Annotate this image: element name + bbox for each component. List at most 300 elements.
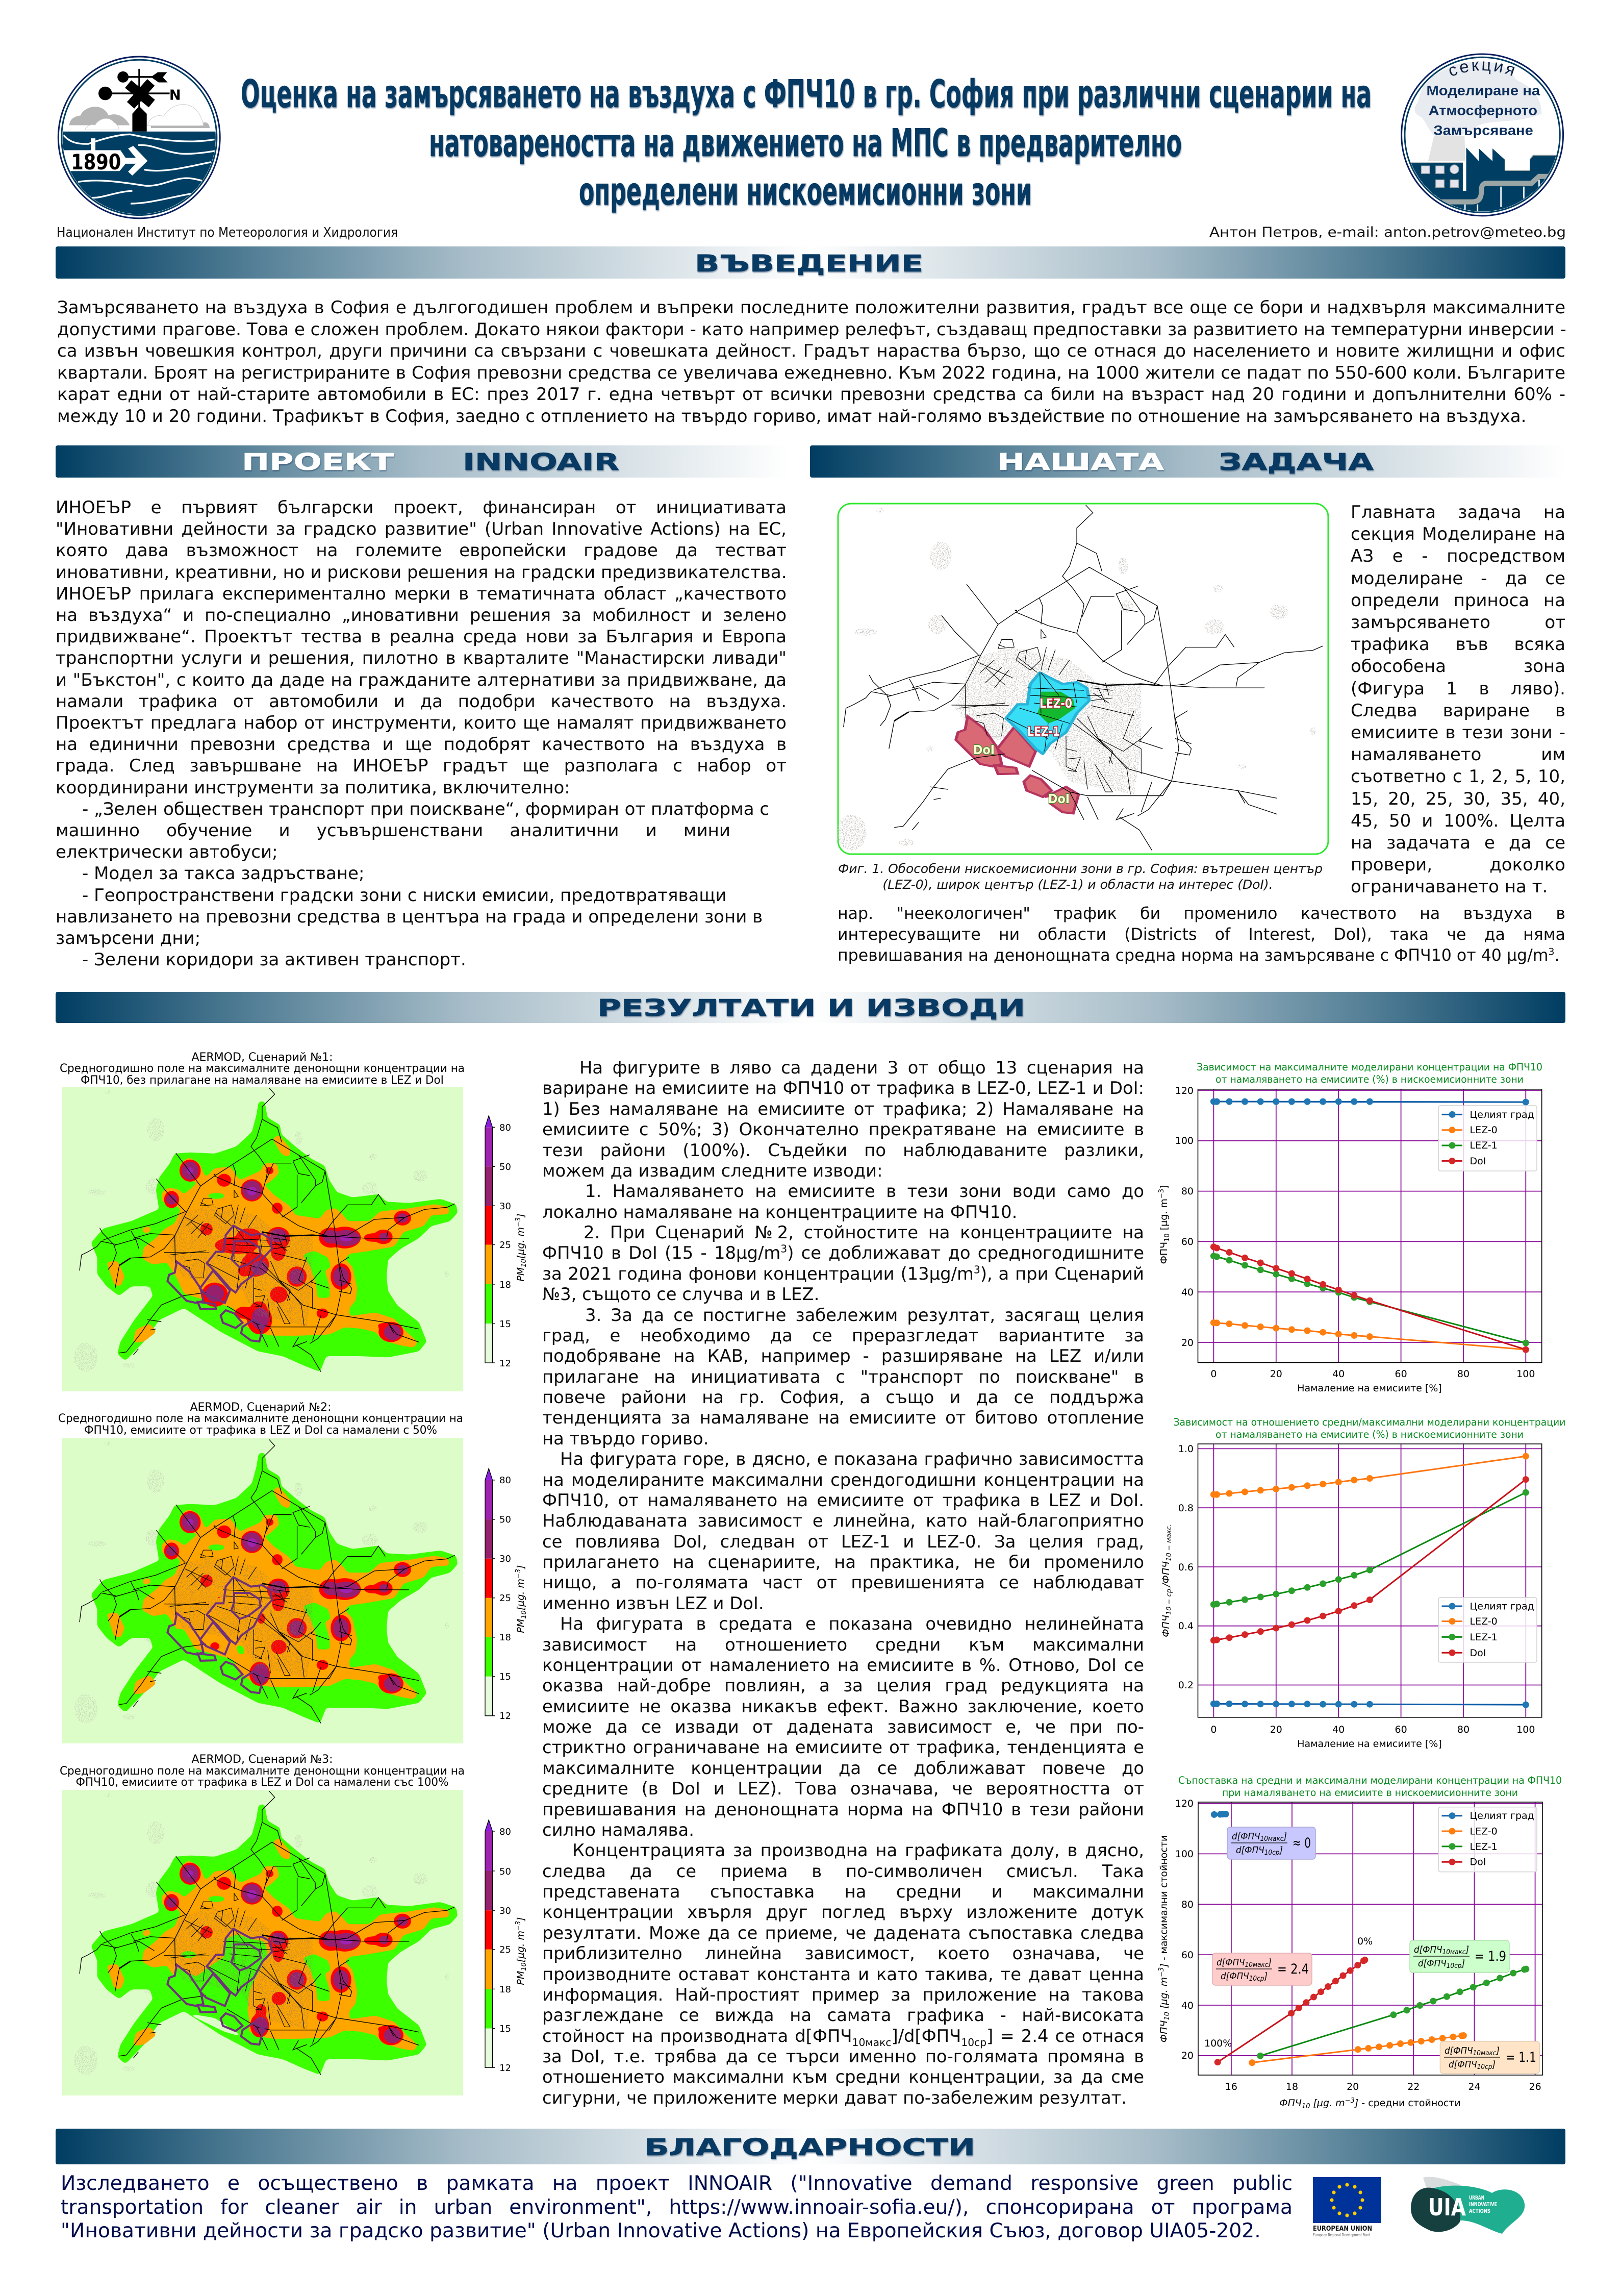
text: our task, continuation: нар. "неекологичен" трафик би променило качеството на въздуха в	[838, 905, 1565, 923]
map: scenario 1: ФПЧ10, без прилагане на намаляване на емисиите в LEZ и DoI	[81, 1074, 444, 1087]
chart 1: maximum concentrations vs emission reduction: LEZ-0	[1470, 1125, 1498, 1136]
chart 1: maximum concentrations vs emission reduction: 80	[1181, 1186, 1194, 1197]
heading: introduction	[56, 246, 1565, 279]
text: project INNOAIR: - „Зелен обществен транспорт при поискване“, формиран от платформа с	[82, 799, 769, 819]
callout: LEZ-0 derivative: ]	[1492, 2059, 1496, 2070]
chart 3: mean versus maximum concentrations: −3	[1158, 1967, 1166, 1977]
text: our task, narrow column: на задачата е да се	[1351, 833, 1565, 853]
chart 2: mean to maximum ratio vs emission reduction: 60	[1395, 1724, 1407, 1735]
text: our task, narrow column: замърсяването от	[1351, 612, 1565, 633]
map: scenario 3: 15	[499, 2024, 511, 2034]
callout: LEZ-1 derivative: = 1.9	[1475, 1949, 1506, 1964]
chart 1: maximum concentrations vs emission reduction: 60	[1395, 1368, 1407, 1380]
figure 1: low emission zones map: DoI	[1048, 791, 1070, 806]
text: results and conclusions	[542, 1058, 1144, 2108]
text: results and conclusions: повече райони на гр. София, а също и да се поддържа	[542, 1387, 1144, 1407]
chart 3: mean versus maximum concentrations: 120	[1175, 1798, 1194, 1809]
chart 3: mean versus maximum concentrations: DoI	[1470, 1857, 1486, 1868]
chart 1: maximum concentrations vs emission reduction: 20	[1181, 1337, 1194, 1349]
chart 3: mean versus maximum concentrations: 22	[1407, 2081, 1420, 2092]
text: results and conclusions: именно извън LEZ и DoI.	[542, 1593, 764, 1613]
text: acknowledgements: Изследването е осъществено в рамката на проект INNOAIR ("Innovative demand responsive green public	[61, 2172, 1293, 2195]
text: results and conclusions: 3. За да се постигне забележим резултат, засягащ целия	[585, 1305, 1144, 1325]
text: results and conclusions: силно намалява.	[542, 1820, 694, 1840]
heading: project INNOAIR: ПРОЕКТ	[242, 448, 394, 476]
text: results and conclusions: отношението максимални към средни концентрации, за да сме	[542, 2067, 1144, 2087]
text: project INNOAIR: - Модел за такса задръстване;	[82, 863, 364, 884]
icon: European Union flag: EUROPEAN UNION	[1313, 2225, 1372, 2233]
text: our task, narrow column: секция Моделиране на	[1351, 524, 1565, 544]
text: results and conclusions: ФПЧ10, от намаляването на емисиите от трафика в LEZ и DoI.	[542, 1490, 1144, 1510]
text: our task, narrow column: емисиите в тези зони -	[1351, 722, 1565, 743]
text: project INNOAIR: транспортни услуги и решения, пилотно в кварталите "Манастирски ливади"	[56, 648, 787, 668]
title: определени нискоемисионни зони	[579, 169, 1032, 214]
icon: Urban Innovative Actions logo: ACTIONS	[1469, 2208, 1490, 2214]
figure 1 caption: Фиг. 1. Обособени нискоемисионни зони в гр. София: вътрешен център	[838, 861, 1323, 876]
chart 1: maximum concentrations vs emission reduction: 20	[1270, 1368, 1282, 1380]
text: our task, narrow column: съответно с 1, 2, 5, 10,	[1351, 766, 1565, 787]
text: results and conclusions: емисиите не оказва никакъв ефект. Важно заключение, което	[542, 1696, 1144, 1716]
text: introduction: квартали. Броят на регистрираните в София превозни средства се увеличава ежедневно. Към 2022 година, на 1000 жители се падат по 550-600 коли. Българите	[57, 362, 1565, 383]
map: scenario 2: ]	[515, 1565, 526, 1569]
text: our task, narrow column: обособена зона	[1351, 656, 1565, 677]
text: introduction	[57, 297, 1566, 427]
map: scenario 2: −3	[515, 1569, 522, 1579]
chart 1: maximum concentrations vs emission reduction: 80	[1457, 1368, 1470, 1380]
text: project INNOAIR: замърсени дни;	[56, 928, 200, 949]
chart 3: mean versus maximum concentrations: 10	[1163, 2012, 1171, 2020]
chart 1: maximum concentrations vs emission reduction: 0	[1210, 1368, 1217, 1380]
chart 3: mean versus maximum concentrations	[1158, 1775, 1562, 2110]
text: results and conclusions: емисиите с 50%; 3) Окончателно прекратяване на емисиите в	[542, 1119, 1144, 1139]
map: scenario 1: −3	[515, 1217, 522, 1227]
chart 2: mean to maximum ratio vs emission reduction: 10 − макс.	[1166, 1524, 1173, 1561]
logo: National Institute of Meteorology and Hydrology: 1890	[71, 149, 121, 174]
callout: LEZ-0 derivative: = 1.1	[1506, 2050, 1536, 2065]
callout: LEZ-0 derivative: ]	[1496, 2045, 1500, 2056]
chart 2: mean to maximum ratio vs emission reduction: 0.8	[1178, 1503, 1194, 1514]
chart 2: mean to maximum ratio vs emission reduction: 0.2	[1178, 1680, 1194, 1691]
chart 1: maximum concentrations vs emission reduction: DoI	[1470, 1156, 1486, 1167]
heading: our task: НАШАТА	[997, 448, 1164, 476]
text: results and conclusions: на моделираните максимални срендогодишни концентрации на	[542, 1469, 1144, 1490]
text: acknowledgements: transportation for cleaner air in urban environment", https://www.innoair-sofia.eu/), спонсорирана от програма	[61, 2196, 1293, 2219]
text: results and conclusions: приблизително линейна зависимост, което означава, че	[542, 1943, 1144, 1963]
chart 3: mean versus maximum concentrations: ]	[1158, 1963, 1170, 1968]
callout: whole city derivative	[1227, 1827, 1315, 1859]
text: project INNOAIR: електрически автобуси;	[56, 842, 278, 862]
text: project INNOAIR: на единични превозни средства и ще подобрят качеството на въздуха в	[56, 734, 787, 755]
callout: whole city derivative: 10макс	[1260, 1835, 1283, 1843]
text: results and conclusions: оказва най-добре повлиян, а за целия град редукцията на	[542, 1676, 1144, 1695]
map: scenario 1: AERMOD, Сценарий №1:	[191, 1051, 333, 1064]
text: our task, narrow column: Главната задача на	[1351, 502, 1565, 522]
chart 3: mean versus maximum concentrations: LEZ-1	[1470, 1841, 1498, 1853]
text: project INNOAIR: на въздуха“ и по-специално „иновативни решения за мобилност и зелено	[56, 605, 787, 626]
map: scenario 3: 50	[499, 1866, 511, 1877]
map: scenario 1: 18	[499, 1280, 511, 1290]
chart 3: mean versus maximum concentrations: ]	[1354, 2098, 1358, 2109]
title	[241, 71, 1372, 214]
map: scenario 2: 15	[499, 1671, 511, 1682]
heading: acknowledgements: БЛАГОДАРНОСТИ	[644, 2134, 975, 2161]
map: scenario 2: 10	[520, 1610, 528, 1619]
map: scenario 3: 18	[499, 1984, 511, 1995]
text: results and conclusions: превишавания на денонощната норма на ФПЧ10 в тези райони	[542, 1799, 1144, 1819]
text: our task, narrow column: намаляването им	[1351, 744, 1565, 765]
map: scenario 2: Средногодишно поле на максималните денонощни концентрации на	[58, 1412, 463, 1425]
map: scenario 2: [µg. m	[515, 1579, 526, 1610]
chart 3: mean versus maximum concentrations: при намаляването на емисиите в нискоемисионните зони	[1222, 1787, 1518, 1799]
chart 1: maximum concentrations vs emission reduction: 100	[1516, 1368, 1535, 1380]
chart 2: mean to maximum ratio vs emission reduction: LEZ-1	[1470, 1632, 1498, 1643]
chart 2: mean to maximum ratio vs emission reduction: 1.0	[1178, 1443, 1194, 1455]
text: results and conclusions: тенденцията за намаляване на емисиите от битово отопление	[542, 1408, 1144, 1428]
map: scenario 3: −3	[515, 1921, 522, 1931]
chart 2: mean to maximum ratio vs emission reduction: 100	[1516, 1724, 1535, 1735]
text: results and conclusions: за 2021 година фонови концентрации (13μg/m3), а при Сценарий	[542, 1263, 1144, 1284]
text: results and conclusions: На фигурата в средата е показана очевидно нелинейната	[560, 1614, 1144, 1634]
text: results and conclusions: на твърдо гориво.	[542, 1429, 708, 1449]
icon: European Union flag: European Regional Development Fund	[1313, 2233, 1370, 2237]
text: our task, narrow column	[1351, 502, 1565, 897]
chart 1: maximum concentrations vs emission reduction: Целият град	[1470, 1109, 1534, 1120]
text: project INNOAIR: Проектът предлага набор от инструменти, които ще намалят придвижването	[56, 713, 787, 733]
chart 1: maximum concentrations vs emission reduction: 60	[1181, 1236, 1194, 1247]
chart 3: mean versus maximum concentrations: 40	[1181, 2000, 1194, 2011]
map: scenario 1: 10	[520, 1259, 528, 1267]
text: results and conclusions: прилагане на инициативата с "транспорт по поискване" в	[542, 1367, 1144, 1387]
chart 2: mean to maximum ratio vs emission reduction: 0.6	[1178, 1562, 1194, 1573]
text: results and conclusions: производните остават константа и като такива, те дават ценна	[542, 1964, 1144, 1984]
text: our task, narrow column: провери, доколко	[1351, 855, 1565, 875]
chart 3: mean versus maximum concentrations: LEZ-0	[1470, 1826, 1498, 1837]
chart 2: mean to maximum ratio vs emission reduction: ФПЧ	[1160, 1615, 1172, 1637]
text: results and conclusions: тези райони (100%). Съдейки по наблюдаваните разлики,	[542, 1140, 1144, 1160]
callout: LEZ-0 derivative: d[ФПЧ	[1445, 2045, 1475, 2056]
callout: LEZ-1 derivative: ]	[1465, 1944, 1469, 1955]
text: results and conclusions: стриктно ограничаване на емисиите от трафика, тенденцията е	[542, 1737, 1144, 1757]
text: results and conclusions: подобряване на КАВ, например - разширяване на LEZ и/или	[542, 1346, 1144, 1366]
text: results and conclusions: град, е необходимо да се преразгледат вариантите за	[542, 1326, 1144, 1345]
heading: results and conclusions	[56, 992, 1565, 1023]
chart 2: mean to maximum ratio vs emission reduction: 40	[1332, 1724, 1345, 1735]
callout: DoI derivative	[1212, 1953, 1312, 1985]
chart 3: mean versus maximum concentrations: 20	[1347, 2081, 1359, 2092]
chart 2: mean to maximum ratio vs emission reduction: Целият град	[1470, 1601, 1534, 1612]
logo: National Institute of Meteorology and Hydrology	[57, 56, 221, 219]
author: Антон Петров, e-mail: anton.petrov@meteo.bg	[1209, 224, 1566, 240]
chart 1: maximum concentrations vs emission reduction: 40	[1332, 1368, 1345, 1380]
map: scenario 3: 10	[520, 1962, 528, 1971]
text: results and conclusions: нищо, а по-голямата част от превишенията се наблюдават	[542, 1573, 1144, 1592]
callout: LEZ-1 derivative: d[ФПЧ	[1418, 1958, 1449, 1969]
map: scenario 2: 80	[499, 1475, 511, 1486]
figure 1: low emission zones map: LEZ-1	[1027, 724, 1060, 739]
map: scenario 2: ФПЧ10, емисиите от трафика в LEZ и DoI са намалени с 50%	[84, 1424, 437, 1437]
heading: results and conclusions: РЕЗУЛТАТИ И ИЗВОДИ	[597, 994, 1025, 1021]
callout: whole city derivative: ≈ 0	[1293, 1835, 1311, 1851]
chart 2: mean to maximum ratio vs emission reduction: Зависимост на отношението средни/максимални моделирани концентрации	[1173, 1416, 1566, 1428]
text: our task, narrow column: трафика във всяка	[1351, 634, 1565, 655]
map: scenario 1: 12	[499, 1358, 511, 1369]
callout: LEZ-1 derivative: ]	[1461, 1958, 1465, 1969]
heading: our task	[810, 445, 1565, 478]
text: results and conclusions: 1. Намаляването на емисиите в тези зони води само до	[585, 1181, 1144, 1201]
text: our task, narrow column: моделиране - да се	[1351, 568, 1565, 589]
chart 3: mean versus maximum concentrations: Целият град	[1470, 1810, 1534, 1821]
text: results and conclusions: следва да се приема в по-символичен смисъл. Така	[542, 1861, 1144, 1881]
callout: LEZ-1 derivative: d[ФПЧ	[1414, 1944, 1445, 1955]
icon: Urban Innovative Actions logo: UIA	[1428, 2193, 1466, 2221]
icon: Urban Innovative Actions logo: URBAN	[1469, 2195, 1484, 2201]
map: scenario 3: 12	[499, 2063, 511, 2074]
map: scenario 1	[60, 1051, 528, 1391]
figure 1 caption: (LEZ-0), широк център (LEZ-1) и области на интерес (DoI).	[882, 877, 1273, 892]
text: project INNOAIR	[56, 497, 787, 970]
map: scenario 2: AERMOD, Сценарий №2:	[190, 1401, 332, 1414]
text: results and conclusions: прилагането на сценариите, на практика, не би променило	[542, 1552, 1144, 1572]
chart 3: mean versus maximum concentrations: 10	[1302, 2103, 1310, 2110]
chart 3: mean versus maximum concentrations: −3	[1345, 2097, 1355, 2105]
chart 2: mean to maximum ratio vs emission reduction: DoI	[1470, 1648, 1486, 1659]
map: scenario 1: PM	[515, 1267, 526, 1282]
text: results and conclusions: зависимост на отношението средни към максимални	[542, 1635, 1144, 1654]
logo: section for atmospheric pollution modelling	[1401, 53, 1564, 216]
text: results and conclusions: сигурни, че приложените мерки дават по-забележим резултат.	[542, 2088, 1127, 2108]
chart 2: mean to maximum ratio vs emission reduction: 80	[1457, 1724, 1470, 1735]
map: scenario 1: 80	[499, 1122, 511, 1133]
callout: LEZ-1 derivative	[1410, 1940, 1509, 1973]
text: results and conclusions: концентрации от намалението на емисиите в %. Отново, DoI се	[542, 1655, 1144, 1675]
chart 2: mean to maximum ratio vs emission reduction	[1160, 1416, 1566, 1750]
text: results and conclusions: стойност на производната d[ФПЧ10макс]/d[ФПЧ10ср] = 2.4 се отнася	[542, 2026, 1144, 2048]
map: scenario 1: 15	[499, 1319, 511, 1330]
chart 2: mean to maximum ratio vs emission reduction: от намаляването на емисиите (%) в нискоемисионните зони	[1215, 1429, 1524, 1440]
chart 1: maximum concentrations vs emission reduction: ФПЧ	[1158, 1242, 1170, 1264]
map: scenario 1: 30	[499, 1201, 511, 1212]
callout: LEZ-0 derivative: d[ФПЧ	[1449, 2059, 1479, 2070]
callout: whole city derivative: d[ФПЧ	[1236, 1845, 1267, 1856]
callout: DoI derivative: d[ФПЧ	[1221, 1971, 1251, 1982]
text: results and conclusions: концентрации хвърля друг поглед върху изложените дотук	[542, 1902, 1144, 1922]
text: results and conclusions: На фигурата горе, в дясно, е показана графично зависимостта	[560, 1449, 1144, 1469]
logo: section for atmospheric pollution modelling: Замърсяване	[1433, 122, 1533, 138]
text: project INNOAIR: иновативни, креативни, но и рискови решения на градски предизвикателства.	[56, 562, 787, 583]
text: results and conclusions: вариране на емисиите на ФПЧ10 от трафика в LEZ-0, LEZ-1 и DoI:	[542, 1078, 1144, 1098]
text: results and conclusions: представената съпоставка на средни и максимални	[542, 1882, 1144, 1902]
icon: Urban Innovative Actions logo: INNOVATIVE	[1469, 2202, 1497, 2208]
map: scenario 2: PM	[515, 1619, 526, 1633]
chart 1: maximum concentrations vs emission reduction: LEZ-1	[1470, 1140, 1498, 1151]
map: scenario 2: 18	[499, 1632, 511, 1643]
heading: acknowledgements	[56, 2129, 1565, 2164]
chart 1: maximum concentrations vs emission reduction: 120	[1175, 1085, 1194, 1096]
text: introduction: Замърсяването на въздуха в София е дългогодишен проблем и въпреки последните положителни развития, градът все още се бори и надхвърля максималните	[57, 297, 1565, 318]
callout: LEZ-1 derivative: 10макс	[1442, 1949, 1465, 1956]
text: results and conclusions: се повлиява DoI, следван от LEZ-1 и LEZ-0. За целия град,	[542, 1532, 1144, 1552]
chart 3: mean versus maximum concentrations: [µg. m	[1310, 2098, 1345, 2109]
text: results and conclusions: 2. При Сценарий №2, стойностите на концентрациите на	[584, 1222, 1144, 1242]
text: results and conclusions: ФПЧ10 в DoI (15 - 18μg/m3) се доближават до средногодишните	[542, 1243, 1144, 1263]
callout: DoI derivative: 10макс	[1245, 1961, 1268, 1969]
text: project INNOAIR: града. След завършване на ИНОЕЪР градът ще разполага с набор от	[56, 756, 787, 776]
text: our task, narrow column: Следва вариране в	[1351, 701, 1565, 721]
text: results and conclusions: може да се извади от дадената зависимост е, че при по-	[542, 1717, 1144, 1737]
text: project INNOAIR: намали трафика от автомобили и да подобри качеството на въздуха.	[56, 691, 787, 712]
chart 1: maximum concentrations vs emission reduction: Намаление на емисиите [%]	[1297, 1383, 1442, 1394]
callout: whole city derivative: 10ср	[1264, 1849, 1279, 1857]
chart 1: maximum concentrations vs emission reduction: Зависимост на максималните моделирани концентрации на ФПЧ10	[1197, 1061, 1542, 1073]
chart 3: mean versus maximum concentrations: 16	[1225, 2081, 1237, 2092]
map: scenario 3: 30	[499, 1906, 511, 1916]
chart 1: maximum concentrations vs emission reduction: [µg. m	[1158, 1199, 1170, 1233]
chart 3: mean versus maximum concentrations: 18	[1286, 2081, 1298, 2092]
logo: National Institute of Meteorology and Hydrology: N	[169, 88, 181, 104]
map: scenario 3: ]	[515, 1917, 526, 1921]
text: project INNOAIR: "Иновативни дейности за градско развитие" (Urban Innovative Actions) на ЕС,	[56, 519, 787, 539]
chart 2: mean to maximum ratio vs emission reduction: /ФПЧ	[1160, 1561, 1172, 1588]
chart 3: mean versus maximum concentrations: 80	[1181, 1899, 1194, 1910]
callout: DoI derivative: ]	[1264, 1971, 1268, 1982]
chart 3: mean versus maximum concentrations: 24	[1468, 2081, 1481, 2092]
text: project INNOAIR: придвижване“. Проектът тества в реална среда нови за България и Европа	[56, 627, 787, 647]
text: results and conclusions: Концентрацията за производна на графиката долу, в дясно,	[572, 1840, 1144, 1860]
chart 3: mean versus maximum concentrations: 60	[1181, 1950, 1194, 1961]
text: our task, narrow column: определи приноса на	[1351, 590, 1565, 611]
chart 3: mean versus maximum concentrations: Съпоставка на средни и максимални моделирани концентрации на ФПЧ10	[1178, 1775, 1562, 1786]
chart 2: mean to maximum ratio vs emission reduction: 10 − ср.	[1166, 1587, 1173, 1615]
text: acknowledgements	[61, 2172, 1293, 2242]
text: results and conclusions: Наблюдаваната зависимост е линейна, като най-благоприятно	[542, 1511, 1144, 1531]
chart 2: mean to maximum ratio vs emission reduction: Намаление на емисиите [%]	[1297, 1738, 1442, 1750]
callout: LEZ-0 derivative	[1440, 2041, 1539, 2074]
chart 1: maximum concentrations vs emission reduction: 100	[1175, 1135, 1194, 1146]
figure 1: low emission zones map	[837, 504, 1328, 854]
text: project INNOAIR: и "Бъкстон", с които да даде на гражданите алтернативи за придвижване, да	[56, 670, 787, 690]
map: scenario 3: PM	[515, 1971, 526, 1985]
map: scenario 2: 12	[499, 1711, 511, 1721]
map: scenario 3: 80	[499, 1827, 511, 1837]
logo: section for atmospheric pollution modelling: Моделиране на	[1426, 82, 1540, 98]
text: results and conclusions: резултати. Може да се приеме, че дадената съпоставка следва	[542, 1923, 1144, 1943]
text: introduction: между 10 и 20 години. Трафикът в София, заедно с отплението на твърдо гориво, имат най-голямо въздействие по отношение на замърсяването на въздуха.	[57, 406, 1526, 427]
callout: DoI derivative: 10ср	[1249, 1975, 1264, 1983]
callout: LEZ-1 derivative: 10ср	[1447, 1962, 1461, 1970]
text: project INNOAIR: - Геопространствени градски зони с ниски емисии, предотвратяващи	[82, 885, 726, 906]
map: scenario 1: ]	[515, 1213, 526, 1218]
chart 3: mean versus maximum concentrations: 0%	[1357, 1936, 1373, 1947]
chart 2: mean to maximum ratio vs emission reduction: 20	[1270, 1724, 1282, 1735]
map: scenario 3: ФПЧ10, емисиите от трафика в LEZ и DoI са намалени със 100%	[75, 1776, 449, 1789]
text: results and conclusions: локално намаляване на концентрациите на ФПЧ10.	[542, 1202, 1017, 1222]
chart 1: maximum concentrations vs emission reduction: ]	[1158, 1185, 1170, 1189]
text: introduction: карат едни от най-старите автомобили в ЕС: през 2017 г. една четвърт от всички превозни средства са били на възраст над 20 години и допълнителни 60% -	[57, 384, 1565, 405]
chart 2: mean to maximum ratio vs emission reduction: LEZ-0	[1470, 1616, 1498, 1627]
chart 1: maximum concentrations vs emission reduction: −3	[1158, 1189, 1166, 1199]
map: scenario 3: 25	[499, 1944, 511, 1955]
map: scenario 3: AERMOD, Сценарий №3:	[191, 1753, 333, 1766]
heading: our task: ЗАДАЧА	[1219, 448, 1374, 476]
text: introduction: са извън човешкия контрол, други причини са свързани с човешката дейност. Градът нараства бързо, що се отнася до населението и новите жилищни и офис	[57, 341, 1565, 361]
chart 1: maximum concentrations vs emission reduction: от намаляването на емисиите (%) в нискоемисионните зони	[1215, 1074, 1524, 1085]
callout: whole city derivative: ]	[1283, 1831, 1287, 1842]
text: project INNOAIR: ИНОЕЪР е първият български проект, финансиран от инициативата	[56, 497, 787, 518]
map: scenario 3: [µg. m	[515, 1931, 526, 1962]
chart 3: mean versus maximum concentrations: ФПЧ	[1158, 2020, 1170, 2042]
text: introduction: допустими прагове. Това е сложен проблем. Докато някои фактори - като например релефът, създаващ предпоставки за развитието на температурни инверсии -	[57, 319, 1566, 340]
callout: DoI derivative: = 2.4	[1277, 1961, 1309, 1977]
chart 3: mean versus maximum concentrations: - средни стойности	[1361, 2098, 1461, 2109]
text: results and conclusions: На фигурите в ляво са дадени 3 от общо 13 сценария на	[579, 1058, 1144, 1078]
text: project INNOAIR: навлизането на превозни средства в центъра на града и определени зони в	[56, 907, 763, 927]
text: results and conclusions: средните (в DoI и LEZ). Това означава, че вероятността от	[542, 1779, 1144, 1799]
map: scenario 3	[60, 1753, 528, 2095]
heading: project INNOAIR	[56, 445, 788, 478]
callout: DoI derivative: d[ФПЧ	[1217, 1957, 1247, 1968]
text: project INNOAIR: координирани инструменти за политика, включително:	[56, 778, 570, 798]
chart 2: mean to maximum ratio vs emission reduction: 0	[1210, 1724, 1217, 1735]
text: results and conclusions: можем да извадим следните изводи:	[542, 1161, 882, 1181]
chart 2: mean to maximum ratio vs emission reduction: 0.4	[1178, 1620, 1194, 1632]
heading: introduction: ВЪВЕДЕНИЕ	[695, 250, 923, 277]
text: results and conclusions: за DoI, т.е. трябва да се търси именно по-голямата промяна в	[542, 2047, 1144, 2066]
callout: LEZ-0 derivative: 10ср	[1477, 2063, 1492, 2071]
text: results and conclusions: разглеждане се вижда на самата графика - най-високата	[542, 2005, 1144, 2025]
chart 3: mean versus maximum concentrations: 20	[1181, 2050, 1194, 2061]
callout: whole city derivative: ]	[1279, 1845, 1283, 1856]
figure 1 caption	[838, 861, 1323, 892]
logo: section for atmospheric pollution modelling: Атмосферното	[1429, 103, 1537, 118]
text: project INNOAIR: машинно обучение и усъвършенствани аналитични и мини	[56, 820, 730, 841]
text: results and conclusions: информация. Най-простият пример за приложение на такова	[542, 1985, 1144, 2005]
icon: Urban Innovative Actions logo	[1411, 2177, 1525, 2234]
callout: DoI derivative: ]	[1268, 1957, 1272, 1968]
chart 1: maximum concentrations vs emission reduction: 40	[1181, 1287, 1194, 1298]
logo: section for atmospheric pollution modelling: секция	[1450, 61, 1515, 76]
map: scenario 1: Средногодишно поле на максималните денонощни концентрации на	[60, 1062, 465, 1075]
chart 1: maximum concentrations vs emission reduction: 10	[1163, 1233, 1171, 1242]
map: scenario 1: 25	[499, 1240, 511, 1251]
chart 3: mean versus maximum concentrations: 100%	[1204, 2038, 1232, 2049]
chart 3: mean versus maximum concentrations: 100	[1175, 1849, 1194, 1860]
text: our task, continuation: превишавания на денонощната средна норма на замърсяване с ФПЧ10 от 40 μg/m3.	[838, 946, 1560, 965]
institute name: Национален Институт по Метеорология и Хидрология	[57, 225, 398, 240]
text: our task, narrow column: (Фигура 1 в ляво).	[1351, 679, 1565, 699]
heading: project INNOAIR: INNOAIR	[463, 448, 619, 476]
chart 3: mean versus maximum concentrations: 26	[1529, 2081, 1541, 2092]
text: project INNOAIR: - Зелени коридори за активен транспорт.	[82, 950, 466, 970]
callout: whole city derivative: d[ФПЧ	[1232, 1831, 1262, 1842]
text: acknowledgements: "Иновативни дейности за градско развитие" (Urban Innovative Actions) на Европейския Съюз, договор UIA05-202.	[61, 2219, 1261, 2242]
text: results and conclusions: №3, същото се случва и в LEZ.	[542, 1284, 819, 1304]
text: our task, narrow column: 45, 50 и 100%. Целта	[1351, 811, 1565, 831]
chart 3: mean versus maximum concentrations: [µg. m	[1158, 1977, 1170, 2012]
figure 1: low emission zones map: LEZ-0	[1040, 696, 1072, 711]
chart 3: mean versus maximum concentrations: ФПЧ	[1279, 2098, 1302, 2109]
map: scenario 2: 30	[499, 1554, 511, 1564]
icon: European Union flag	[1313, 2177, 1381, 2237]
text: our task, continuation	[838, 905, 1565, 965]
map: scenario 2: 25	[499, 1593, 511, 1604]
text: results and conclusions: максималните концентрации да се доближават повече до	[542, 1758, 1144, 1778]
map: scenario 1: 50	[499, 1162, 511, 1172]
chart 1: maximum concentrations vs emission reduction	[1158, 1061, 1542, 1394]
text: project INNOAIR: която дава възможност на големите европейски градове да тестват	[56, 540, 787, 561]
text: our task, narrow column: 15, 20, 25, 30, 35, 40,	[1351, 789, 1565, 809]
callout: LEZ-0 derivative: 10макс	[1473, 2050, 1496, 2057]
chart 3: mean versus maximum concentrations: - максимални стойности	[1158, 1835, 1170, 1960]
